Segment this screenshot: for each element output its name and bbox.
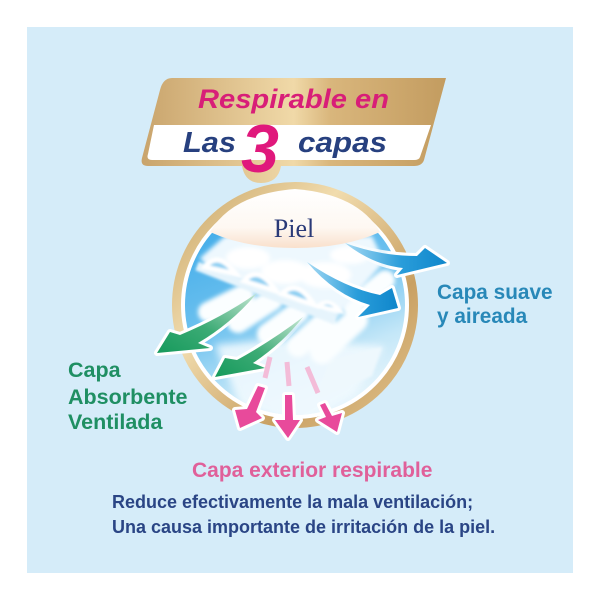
arrow: green left: [157, 293, 257, 353]
banner white strip: [148, 125, 431, 160]
label: Capa Absorbente Ventilada: [68, 358, 188, 434]
label: Piel: Piel: [274, 214, 314, 243]
title banner: [142, 78, 446, 187]
capsules: [208, 280, 385, 352]
arrow: blue upper: [345, 243, 447, 275]
banner gold frame: [142, 78, 446, 183]
label: Capa Absorbente Ventilada: Absorbente: [68, 385, 188, 409]
bottom sheet: [215, 340, 385, 425]
connecting strip: [197, 266, 335, 320]
description text: Reduce efectivamente la mala ventilación;: [112, 492, 473, 512]
arrow: pink right: [307, 367, 342, 432]
label: Capa Absorbente Ventilada: Ventilada: [68, 410, 163, 434]
skin layer: [210, 189, 380, 248]
arrow: pink center: [275, 362, 300, 438]
heading: Respirable en: Respirable en: [198, 84, 389, 114]
gold ring: [176, 186, 414, 424]
blue lens interior: [185, 195, 405, 415]
heading: capas: capas: [298, 127, 387, 159]
top layer: [200, 236, 384, 318]
arrow: blue lower: [307, 262, 398, 317]
diagram: layered diaper lens: [157, 186, 447, 438]
label: Capa suave y aireada: [437, 281, 553, 328]
arrow: green right: [215, 317, 303, 377]
material layers: [197, 236, 385, 425]
description text: [112, 492, 495, 537]
label: Capa exterior respirable: Capa exterior respirable: [192, 459, 432, 482]
label: Capa suave y aireada: y aireada: [437, 305, 528, 328]
arches: [205, 260, 340, 311]
heading: 3: 3: [241, 111, 279, 187]
arrow: pink left: [235, 357, 270, 428]
label: Capa Absorbente Ventilada: Capa: [68, 358, 122, 382]
label: Capa suave y aireada: Capa suave: [437, 281, 553, 304]
description text: Una causa importante de irritación de la piel.: [112, 517, 495, 537]
heading: Las: Las: [183, 127, 236, 159]
